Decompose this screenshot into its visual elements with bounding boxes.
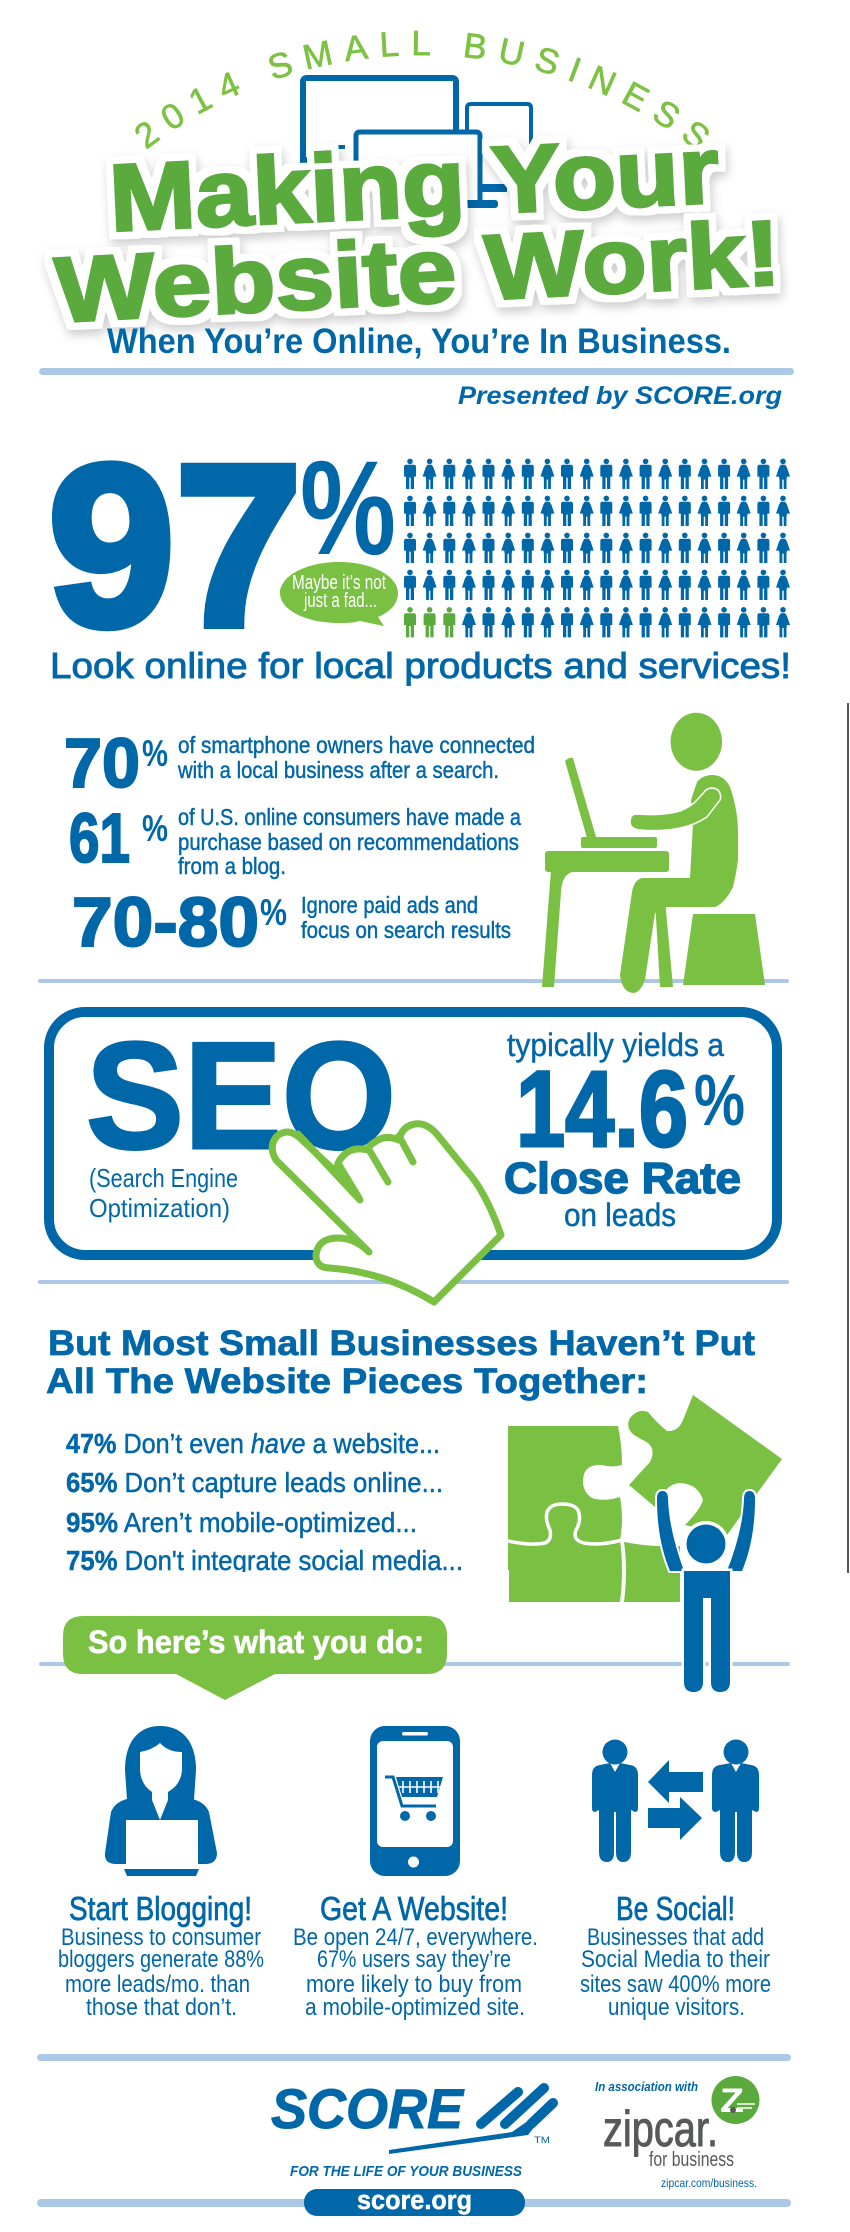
stat 70-80 percent: % — [260, 892, 287, 933]
SEO definition: Optimization) — [89, 1193, 230, 1223]
close rate stat: 14.6 — [516, 1048, 688, 1169]
divider — [37, 2054, 791, 2061]
column: be social: unique visitors. — [608, 1994, 745, 2021]
SEO definition: (Search Engine — [89, 1163, 238, 1193]
heading — [46, 1324, 755, 1401]
zipcar sponsor block: for business — [649, 2149, 734, 2171]
stat 61 percent: purchase based on recommendations — [178, 829, 519, 855]
stat 70 percent: % — [142, 733, 168, 774]
panel: 97 percent — [48, 417, 791, 686]
icon: puzzle — [508, 1395, 782, 1602]
list of statistics: 47% Don’t even have a website... — [66, 1428, 440, 1459]
column: be social: Social Media to their — [581, 1946, 770, 1973]
column: start blogging: bloggers generate 88% — [58, 1946, 264, 1973]
arched kicker text: 2014 SMALL BUSINESS — [135, 30, 709, 150]
list of statistics — [66, 1428, 463, 1576]
title: making your website work: Website Work! — [53, 202, 783, 342]
column: start blogging: Business to consumer — [61, 1924, 261, 1951]
panel: what to do — [37, 1726, 791, 2061]
divider — [38, 1280, 789, 1284]
stat 70-80 percent: Ignore paid ads and — [301, 892, 478, 918]
stat 61 percent: of U.S. online consumers have made a — [178, 804, 521, 830]
close rate stat: Close Rate — [504, 1154, 741, 1203]
title: making your website work — [53, 117, 783, 342]
panel: SEO — [38, 1011, 789, 1302]
icon: phone with shopping cart — [370, 1726, 460, 1876]
column: be social: sites saw 400% more — [580, 1971, 771, 1998]
page edge line — [847, 703, 849, 1573]
presented by: Presented by SCORE.org — [458, 382, 782, 410]
stat 61 percent — [69, 799, 521, 879]
callout: so here's what you do — [63, 1616, 447, 1700]
zipcar sponsor block: In association with — [595, 2080, 698, 2094]
icon: zipcar badge — [712, 2076, 760, 2124]
callout: so here's what you do: So here’s what you do: — [88, 1624, 424, 1660]
panel: stats — [38, 713, 789, 993]
column: be social — [580, 1740, 771, 2021]
icon: two men exchanging arrows — [592, 1740, 759, 1862]
column: be social: Businesses that add — [587, 1924, 764, 1951]
stat 70 percent: of smartphone owners have connected — [178, 732, 535, 758]
box frame — [49, 1012, 777, 1255]
panel: website pieces — [39, 1324, 790, 1700]
zipcar sponsor block — [595, 2076, 760, 2190]
stat 70 percent: 70 — [64, 724, 140, 802]
stat 70-80 percent: 70-80 — [72, 883, 259, 961]
close rate stat: on leads — [564, 1197, 676, 1233]
pill: score.org: score.org — [357, 2185, 472, 2215]
column: get a website: 67% users say they’re — [317, 1946, 511, 1973]
icon: woman blogger — [105, 1726, 217, 1876]
list of statistics: 65% Don’t capture leads online... — [66, 1467, 443, 1498]
logo: SCORE: FOR THE LIFE OF YOUR BUSINESS — [290, 2163, 522, 2180]
stat 70 percent: with a local business after a search. — [177, 757, 499, 783]
speech bubble: Maybe it’s not — [292, 572, 386, 594]
icon: man lifting puzzle piece — [657, 1491, 755, 1692]
panel: header — [39, 30, 794, 410]
panel: footer — [37, 2076, 791, 2216]
column: get a website: a mobile-optimized site. — [305, 1994, 525, 2021]
stat 61 percent: 61 — [69, 799, 130, 877]
heading: But Most Small Businesses Haven’t Put — [48, 1324, 755, 1363]
close rate stat: typically yields a — [507, 1027, 724, 1063]
icon: zipcar badge: Z — [720, 2082, 744, 2120]
caption: Look online for local products and services! — [50, 645, 791, 686]
pictogram of 100 people — [404, 459, 790, 637]
column: be social: Be Social! — [616, 1890, 735, 1927]
column: start blogging: Start Blogging! — [69, 1890, 252, 1927]
stat 70-80 percent: focus on search results — [301, 917, 511, 943]
SEO word: SEO — [86, 1011, 396, 1181]
column: start blogging: more leads/mo. than — [65, 1971, 250, 1998]
pill: score.org — [304, 2185, 525, 2216]
stat 70 percent — [64, 724, 535, 802]
icon: person at laptop — [542, 713, 765, 993]
heading: All The Website Pieces Together: — [46, 1362, 648, 1401]
column: get a website: Be open 24/7, everywhere. — [293, 1924, 538, 1951]
list of statistics: 75% Don't integrate social media... — [66, 1545, 463, 1576]
zipcar sponsor block: zipcar. — [603, 2101, 718, 2157]
column: start blogging — [58, 1726, 264, 2021]
close rate stat: % — [694, 1061, 745, 1141]
stat 61 percent: from a blog. — [178, 853, 286, 879]
big number 97: 97 — [48, 417, 302, 674]
stat 70-80 percent — [72, 883, 511, 961]
SEO definition — [89, 1163, 238, 1223]
logo: SCORE: SCORE — [271, 2077, 465, 2140]
percent sign: % — [300, 434, 396, 583]
icon: pointing hand — [272, 1124, 501, 1302]
title: making your website work: Making Your — [107, 117, 721, 252]
speech bubble — [280, 562, 398, 626]
column: get a website — [293, 1726, 538, 2021]
divider — [38, 979, 789, 983]
column: get a website: more likely to buy from — [306, 1971, 522, 1998]
close rate stat — [504, 1027, 745, 1233]
speech bubble: just a fad... — [303, 590, 377, 612]
logo: SCORE — [271, 2077, 553, 2180]
list of statistics: 95% Aren’t mobile-optimized... — [66, 1507, 417, 1538]
column: start blogging: those that don’t. — [86, 1994, 237, 2021]
divider behind bubble — [39, 1662, 790, 1666]
column: get a website: Get A Website! — [320, 1890, 508, 1927]
divider — [37, 2199, 791, 2207]
stat 61 percent: % — [142, 808, 168, 849]
zipcar sponsor block: zipcar.com/business. — [661, 2176, 757, 2190]
logo: SCORE: TM — [534, 2135, 550, 2145]
tagline: When You’re Online, You’re In Business. — [107, 322, 731, 361]
icon: devices — [303, 78, 531, 208]
divider — [39, 368, 794, 375]
